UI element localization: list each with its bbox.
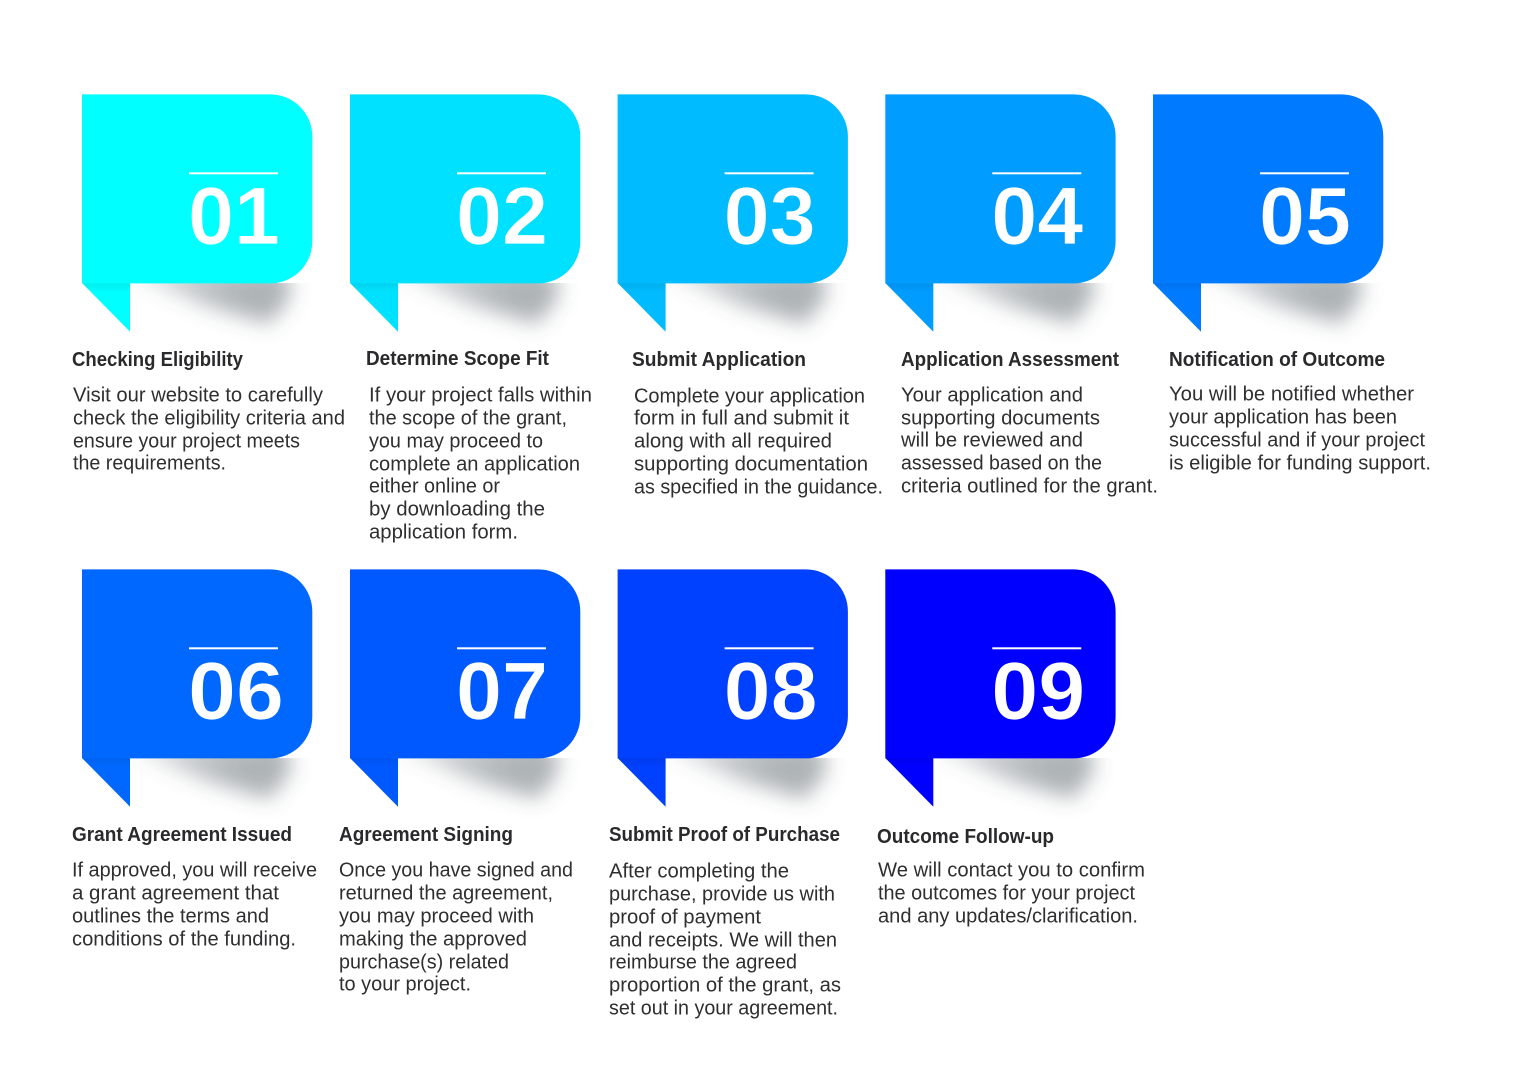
speech bubble 03: 03 [724, 171, 816, 262]
description 08: proportion of the grant, as [609, 974, 841, 996]
speech bubble 04 [885, 94, 1116, 332]
description 01: check the eligibility criteria and [73, 408, 345, 430]
speech bubble 06: 06 [188, 646, 284, 737]
description 03 [634, 386, 883, 498]
description 04: assessed based on the [901, 452, 1102, 474]
description 04: will be reviewed and [900, 430, 1083, 452]
speech bubble 02 [350, 94, 580, 332]
speech bubble 08 [618, 569, 848, 807]
description 04 [900, 384, 1158, 498]
speech bubble 02: 02 [456, 171, 548, 262]
description 04: criteria outlined for the grant. [901, 476, 1158, 498]
description 03: form in full and submit it [634, 408, 849, 430]
step 05: notification of outcome [1153, 94, 1431, 474]
description 08: purchase, provide us with [609, 884, 835, 906]
description 09: and any updates/clarification. [878, 906, 1138, 928]
speech bubble 01 [82, 94, 312, 332]
heading 01: Checking Eligibility [72, 349, 244, 371]
description 01 [73, 384, 345, 474]
step 03: submit application [618, 94, 883, 498]
step 07: agreement signing [339, 569, 580, 996]
speech bubble 05 [1153, 94, 1383, 332]
description 02: If your project falls within [369, 384, 592, 406]
step 09: outcome follow-up [877, 569, 1145, 928]
description 02: the scope of the grant, [369, 408, 567, 430]
description 07: to your project. [339, 974, 471, 996]
description 03: along with all required [634, 430, 832, 452]
description 05: your application has been [1169, 406, 1397, 428]
heading 06: Grant Agreement Issued [72, 824, 292, 846]
description 03: supporting documentation [634, 454, 868, 476]
description 08: and receipts. We will then [609, 930, 837, 952]
description 03: Complete your application [634, 386, 865, 408]
description 01: Visit our website to carefully [73, 384, 323, 406]
description 08: reimburse the agreed [609, 952, 797, 974]
step 06: grant agreement issued [72, 569, 317, 950]
description 08: set out in your agreement. [609, 998, 838, 1020]
step 01: checking eligibility [72, 94, 345, 474]
speech bubble 08: 08 [724, 646, 818, 737]
description 07: purchase(s) related [339, 952, 509, 974]
speech bubble 05: 05 [1259, 171, 1351, 262]
heading 09: Outcome Follow-up [877, 826, 1054, 848]
speech bubble 04: 04 [991, 171, 1084, 262]
speech bubble 07 [350, 569, 580, 807]
heading 07: Agreement Signing [339, 824, 513, 846]
description 08 [609, 860, 841, 1020]
description 04: Your application and [901, 384, 1083, 406]
description 02: complete an application [369, 454, 580, 476]
description 07: Once you have signed and [339, 860, 573, 882]
description 09: the outcomes for your project [878, 882, 1135, 904]
step 04: application assessment [885, 94, 1158, 498]
description 06: outlines the terms and [72, 906, 269, 928]
description 02: either online or [369, 476, 500, 498]
description 02: you may proceed to [369, 430, 543, 452]
speech bubble 09 [885, 569, 1116, 807]
description 02 [369, 384, 592, 544]
description 08: After completing the [609, 860, 789, 882]
speech bubble 03 [618, 94, 848, 332]
description 06: a grant agreement that [72, 882, 279, 904]
speech bubble 06 [82, 569, 312, 807]
speech bubble 09: 09 [991, 646, 1085, 737]
speech bubble 01: 01 [188, 171, 280, 262]
description 09: We will contact you to confirm [878, 860, 1145, 882]
heading 05: Notification of Outcome [1169, 349, 1385, 371]
heading 03: Submit Application [632, 349, 806, 371]
description 07 [339, 860, 573, 996]
description 06: If approved, you will receive [72, 860, 317, 882]
description 05: is eligible for funding support. [1169, 452, 1431, 474]
description 05 [1169, 384, 1431, 474]
description 02: by downloading the [369, 498, 545, 520]
description 07: you may proceed with [339, 906, 534, 928]
description 09 [878, 860, 1145, 928]
speech bubble 07: 07 [456, 646, 548, 737]
description 01: the requirements. [73, 452, 226, 474]
description 08: proof of payment [609, 906, 761, 928]
description 02: application form. [369, 522, 518, 544]
heading 02: Determine Scope Fit [366, 348, 549, 370]
description 05: You will be notified whether [1169, 384, 1414, 406]
description 03: as specified in the guidance. [634, 476, 883, 498]
description 04: supporting documents [901, 408, 1100, 430]
description 06 [72, 860, 317, 950]
description 07: returned the agreement, [339, 882, 553, 904]
description 05: successful and if your project [1169, 430, 1425, 452]
heading 08: Submit Proof of Purchase [609, 824, 840, 846]
heading 04: Application Assessment [901, 349, 1119, 371]
description 01: ensure your project meets [73, 430, 300, 452]
step 08: submit proof of purchase [609, 569, 848, 1020]
step 02: determine scope fit [350, 94, 592, 544]
description 06: conditions of the funding. [72, 928, 296, 950]
description 07: making the approved [339, 928, 527, 950]
